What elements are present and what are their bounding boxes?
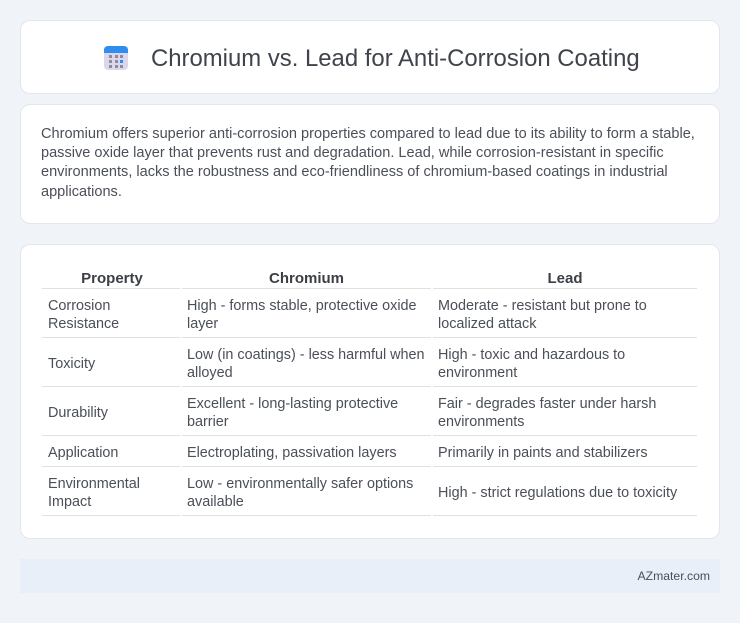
row: toxicity: alloyed	[187, 365, 233, 381]
row: corrosion resistance: layer	[187, 316, 218, 332]
icon: calendar	[104, 46, 128, 70]
panel: comparison table	[20, 244, 720, 539]
row: application: Application	[48, 445, 118, 461]
summary text	[41, 126, 695, 200]
row: environmental impact	[48, 476, 678, 510]
table header	[81, 270, 582, 287]
panel: summary	[20, 104, 720, 224]
row: corrosion resistance: Resistance	[48, 316, 119, 332]
row: durability: Fair - degrades faster under harsh	[438, 396, 656, 412]
row: corrosion resistance	[48, 298, 647, 332]
summary text: applications.	[41, 184, 122, 200]
row: durability	[48, 396, 656, 430]
row: toxicity: High - toxic and hazardous to	[438, 347, 625, 363]
title card	[20, 20, 720, 94]
row: application: Primarily in paints and stabilizers	[438, 445, 648, 461]
row: environmental impact: High - strict regulations due to toxicity	[438, 485, 677, 501]
row: toxicity	[48, 347, 625, 381]
row: durability: barrier	[187, 414, 229, 430]
row: environmental impact: Low - environmentally safer options	[187, 476, 413, 492]
summary text: Chromium offers superior anti-corrosion properties compared to lead due to its ability to form a stable,	[41, 126, 695, 142]
row: corrosion resistance: Corrosion	[48, 298, 110, 314]
summary text: environments, lacks the robustness and eco-friendliness of chromium-based coatings in industrial	[41, 164, 668, 180]
row: environmental impact: available	[187, 494, 244, 510]
row: corrosion resistance: Moderate - resistant but prone to	[438, 298, 647, 314]
row: toxicity: Toxicity	[48, 356, 95, 372]
table header: Lead	[547, 270, 582, 287]
row: environmental impact: Environmental	[48, 476, 140, 492]
row: durability: Durability	[48, 405, 108, 421]
row: durability: environments	[438, 414, 524, 430]
row: environmental impact: Impact	[48, 494, 91, 510]
row: corrosion resistance: localized attack	[438, 316, 536, 332]
table header: Chromium	[269, 270, 344, 287]
summary text: passive oxide layer that prevents rust and degradation. Lead, while corrosion-resistant in specific	[41, 145, 664, 161]
footer text: AZmater.com	[638, 569, 710, 583]
row: application	[48, 445, 648, 461]
footer bar	[20, 559, 720, 593]
row: toxicity: environment	[438, 365, 517, 381]
row: durability: Excellent - long-lasting protective	[187, 396, 398, 412]
title: Chromium vs. Lead for Anti-Corrosion Coating	[151, 45, 640, 72]
row: toxicity: Low (in coatings) - less harmful when	[187, 347, 425, 363]
row: application: Electroplating, passivation layers	[187, 445, 397, 461]
table header: Property	[81, 270, 143, 287]
row: corrosion resistance: High - forms stable, protective oxide	[187, 298, 417, 314]
